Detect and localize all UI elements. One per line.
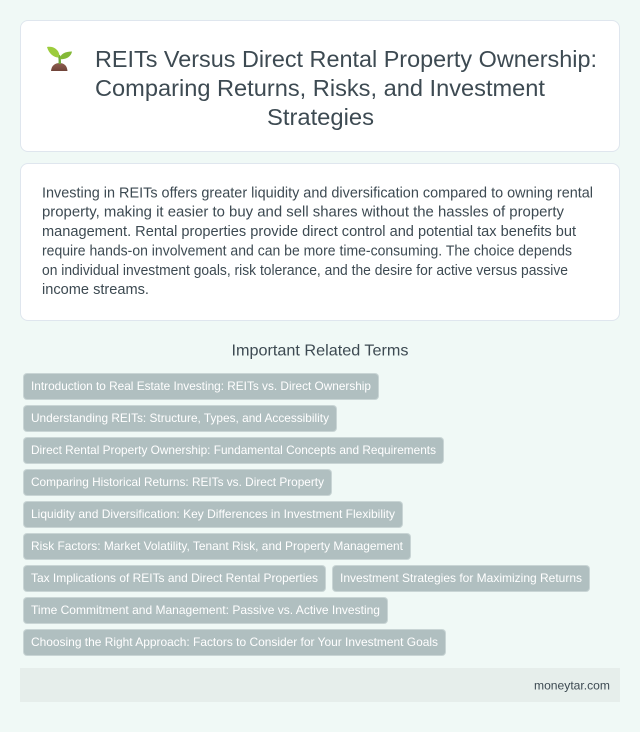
tag: time commitment: Time Commitment and Management: Passive vs. Active Investing — [31, 603, 380, 617]
summary text: income streams. — [42, 282, 149, 298]
heading — [95, 46, 597, 130]
heading: REITs Versus Direct Rental Property Ownership: — [95, 46, 597, 72]
tag: choosing approach: Choosing the Right Approach: Factors to Consider for Your Investment Goals — [31, 635, 438, 649]
summary text — [42, 185, 593, 298]
tag: liquidity — [24, 502, 402, 527]
summary text: management. Rental properties provide direct control and potential tax benefits but — [42, 224, 576, 240]
title card — [20, 20, 620, 152]
tag: tax implications: Tax Implications of REITs and Direct Rental Properties — [31, 571, 318, 585]
tag: risk factors: Risk Factors: Market Volatility, Tenant Risk, and Property Management — [31, 539, 404, 553]
tag: liquidity: Liquidity and Diversification: Key Differences in Investment Flexibility — [31, 507, 395, 521]
tag: tax implications — [24, 566, 325, 591]
tag: understanding REITs — [24, 406, 336, 431]
tag: direct ownership: Direct Rental Property Ownership: Fundamental Concepts and Requirements — [31, 443, 436, 457]
summary card — [20, 163, 620, 321]
tag: introduction — [24, 374, 378, 399]
related terms heading: Important Related Terms — [232, 342, 408, 360]
tag: direct ownership — [24, 438, 443, 463]
tag: historical returns — [24, 470, 331, 495]
footer source text: moneytar.com — [534, 678, 610, 692]
heading: Comparing Returns, Risks, and Investment — [95, 75, 545, 101]
summary text: on individual investment goals, risk tolerance, and the desire for active versus passive — [42, 263, 568, 279]
heading: Strategies — [267, 104, 374, 130]
tag: investment strategies — [333, 566, 589, 591]
summary text: require hands-on involvement and can be more time-consuming. The choice depends — [42, 244, 572, 260]
icon: seedling — [47, 46, 72, 71]
tag: understanding REITs: Understanding REITs: Structure, Types, and Accessibility — [31, 411, 329, 425]
tag: introduction: Introduction to Real Estate Investing: REITs vs. Direct Ownership — [31, 379, 371, 393]
summary text: Investing in REITs offers greater liquidity and diversification compared to owning rental — [42, 185, 593, 201]
tag: risk factors — [24, 534, 410, 559]
footer bar — [20, 668, 620, 702]
tag: time commitment — [24, 598, 387, 623]
tag: choosing approach — [24, 630, 445, 655]
tag: historical returns: Comparing Historical Returns: REITs vs. Direct Property — [31, 475, 324, 489]
summary text: property, making it easier to buy and sell shares without the hassles of property — [42, 205, 565, 221]
tag: investment strategies: Investment Strategies for Maximizing Returns — [340, 571, 582, 585]
